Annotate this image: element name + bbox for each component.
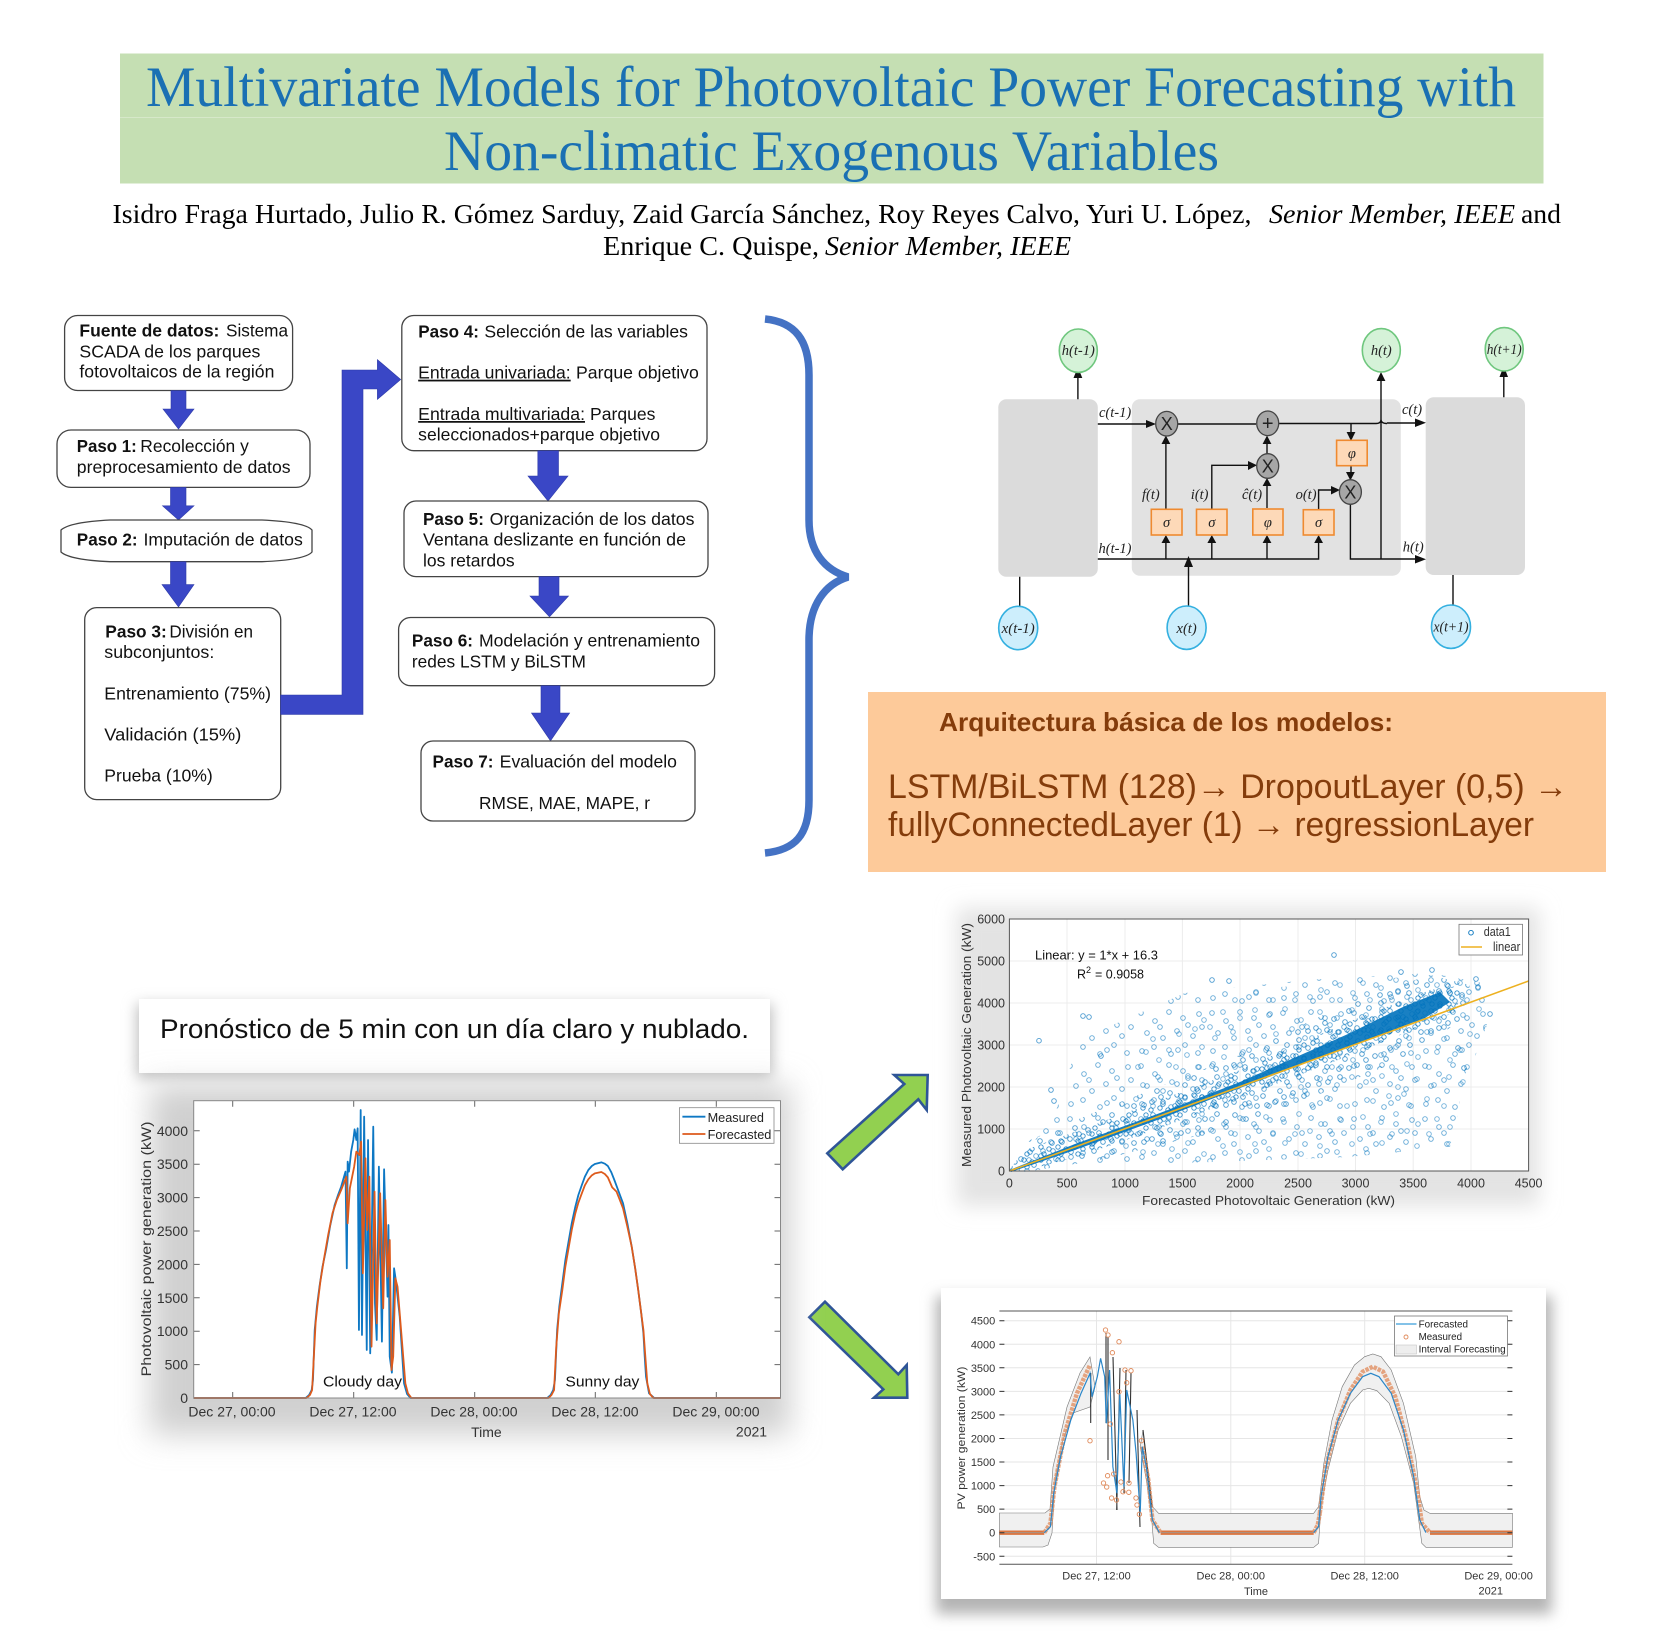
gate: input multiply [1257,454,1279,478]
x axis labels: 2500 [1284,1176,1312,1190]
x axis labels: Dec 28, 12:00 [551,1404,639,1420]
box: paso 3: División en [169,621,253,641]
box: paso 6: redes LSTM y BiLSTM [412,651,586,671]
y axis labels: 3000 [977,1038,1005,1052]
authors: Enrique C. Quispe, [603,231,819,261]
fit equation: 2 [1086,965,1091,975]
plot border [194,1101,780,1398]
x axis labels: Dec 28, 00:00 [1197,1570,1265,1582]
forecasted curve [194,1142,780,1398]
arrow: paso 6 to paso 7 [532,686,570,741]
x axis labels: 3000 [1342,1176,1369,1190]
y axis labels: 2000 [157,1256,188,1272]
gate: forget multiply: X [1161,414,1173,434]
box: paso 4: Entrada multivariada: [418,404,585,424]
output node: h(t-1) [1059,329,1097,372]
scatter plot [957,908,1543,1208]
x axis title: Forecasted Photovoltaic Generation (kW) [1142,1194,1395,1208]
authors: Senior Member, IEEE [825,231,1072,261]
y axis labels: 2500 [971,1410,995,1422]
box: paso 3: Validación (15%) [104,724,241,744]
x axis labels: Time [471,1424,502,1440]
y axis labels: 500 [165,1357,188,1373]
input node: x(t-1) [999,606,1038,650]
gate: cell add: + [1262,413,1274,435]
y axis labels: 500 [977,1504,995,1516]
output node: h(t+1) [1485,328,1523,371]
legend: Interval Forecasting [1419,1345,1506,1356]
box: paso 2 [61,520,312,562]
y axis labels [157,1123,188,1406]
y axis labels: 1500 [971,1457,995,1469]
x axis labels: Dec 27, 12:00 [309,1404,397,1420]
input node: x(t) [1167,606,1206,649]
input node: x(t+1) [1432,605,1470,648]
arrow: to scatter plot [827,1075,928,1169]
box: paso 3: Paso 3: [105,621,167,641]
x axis labels: 2021 [736,1424,767,1440]
interval band: fall and second day [1140,1354,1512,1547]
gate: output multiply [1339,480,1361,504]
input node: x(t+1): x(t+1) [1433,620,1469,636]
box: paso 7: Paso 7: [432,752,494,772]
y axis labels: 2000 [971,1434,995,1446]
box: paso 7: RMSE, MAE, MAPE, r [479,793,650,813]
y axis labels [971,1316,995,1563]
panel shadow [936,1296,1552,1614]
x axis labels: Dec 28, 00:00 [430,1404,518,1420]
cell: left [998,399,1098,577]
x axis labels: Time [1244,1586,1268,1598]
gridlines [999,1311,1512,1564]
x axis labels: Dec 28, 12:00 [1330,1570,1399,1582]
gate: output multiply: X [1344,482,1356,502]
x axis labels: 0 [1006,1176,1013,1190]
activation: input sigma [1196,509,1227,535]
title banner: Multivariate Models for Photovoltaic Power Forecasting with [146,56,1516,119]
signal labels: h(t) [1403,540,1424,556]
output node: h(t-1): h(t-1) [1062,343,1095,359]
cell: right [1426,397,1525,575]
brace [765,319,848,853]
interval band: first rise [999,1357,1095,1547]
panel: model architecture: fullyConnectedLayer (1) → regressionLayer [888,806,1534,844]
ticks [194,1101,780,1398]
measured points [999,1365,1512,1533]
y axis labels: 1500 [157,1290,188,1306]
day labels: Sunny day [565,1375,640,1391]
signal labels: i(t) [1191,487,1209,503]
x axis labels: 4500 [1515,1176,1543,1190]
scatter cloud [1009,953,1492,1172]
x axis labels: 3500 [1399,1176,1427,1190]
x axis labels [1006,1176,1543,1190]
output node: h(t+1): h(t+1) [1487,342,1522,358]
signal labels: f(t) [1142,487,1160,503]
legend: data1 [1484,925,1511,939]
soft shadow [957,908,1539,1206]
x axis labels [1062,1570,1533,1598]
y axis labels [977,912,1005,1178]
fit equation: Linear: y = 1*x + 16.3 [1035,948,1158,962]
legend [1459,924,1522,955]
signal labels: ĉ(t) [1242,487,1262,503]
box: paso 5 [404,501,708,577]
y axis labels: 3500 [157,1156,188,1172]
legend: Forecasted [708,1127,771,1142]
activation: candidate phi [1253,509,1283,535]
fit equation: = 0.9058 [1095,967,1144,981]
day labels [323,1375,640,1391]
title banner [120,54,1544,184]
box: paso 5: Paso 5: [423,509,484,529]
box: paso 3: Entrenamiento (75%) [104,683,271,703]
box: paso 4: Parque objetivo [576,363,699,383]
output node: h(t) [1362,329,1400,372]
fit equation: R [1077,967,1086,981]
soft shadow [150,1085,790,1435]
x axis labels: Dec 29, 00:00 [1464,1570,1533,1582]
box: paso 3: subconjuntos: [104,642,214,662]
activation: forget sigma: σ [1163,515,1171,531]
y axis labels: 1000 [157,1323,188,1339]
signal labels: h(t-1) [1098,541,1132,557]
arrow: fuente to paso 1 [163,391,194,429]
y axis labels: 4500 [971,1316,995,1328]
box: paso 4: Entrada univariada: [418,363,571,383]
y axis labels: 3000 [157,1190,188,1206]
authors: Isidro Fraga Hurtado, Julio R. Gómez Sarduy, Zaid García Sánchez, Roy Reyes Calvo, Yuri U. López, [112,199,1252,229]
output node: h(t): h(t) [1371,343,1392,359]
measured outliers [1088,1328,1144,1517]
y axis labels: 0 [989,1528,995,1540]
title banner: Non-climatic Exogenous Variables [444,120,1219,183]
y axis labels: 4000 [977,996,1005,1010]
signal labels: o(t) [1296,487,1317,503]
panel [941,1288,1546,1599]
authors: Senior Member, IEEE [1269,199,1516,229]
line chart: 5 min forecast [138,1085,790,1440]
box: paso 7 [421,741,695,821]
box: fuente de datos: Sistema [226,321,288,341]
forecast line [1044,1358,1426,1533]
arrow: paso 4 to paso 5 [528,451,568,501]
flowchart [57,316,715,821]
y axis labels: 2500 [157,1223,188,1239]
arrow: paso 1 to paso 2 [162,487,194,520]
activation: input sigma: σ [1208,515,1216,531]
activation: cell phi: φ [1348,446,1356,462]
activation: output sigma: σ [1315,515,1323,531]
arrow: paso 5 to paso 6 [530,577,568,617]
y axis labels: 3000 [971,1386,995,1398]
y axis labels: 2000 [977,1080,1005,1094]
activation: output sigma [1303,510,1334,535]
box: paso 1: preprocesamiento de datos [77,457,291,477]
y axis labels: 1000 [971,1481,995,1493]
box: paso 6 [399,618,715,686]
panel: model architecture [868,692,1606,872]
legend: Measured [1419,1332,1462,1343]
day labels: Cloudy day [323,1375,403,1391]
authors [112,199,1562,261]
y axis title: PV power generation (kW) [956,1366,968,1510]
authors: and [1521,199,1562,229]
box: paso 7: Evaluación del modelo [500,752,677,772]
panel: model architecture: Arquitectura básica de los modelos: [939,707,1393,737]
fit equation [1035,948,1158,981]
x axis labels: 1000 [1111,1176,1139,1190]
x axis labels: 2000 [1226,1176,1254,1190]
x axis labels: 1500 [1168,1176,1196,1190]
legend: Measured [708,1110,764,1125]
panel: model architecture: LSTM/BiLSTM (128)→ DropoutLayer (0,5) → [888,768,1568,806]
plot area [194,1101,780,1398]
box: paso 4: Paso 4: [418,321,479,341]
signal labels [1098,402,1424,557]
box: paso 3 [85,608,281,800]
box: paso 5: los retardos [423,550,515,570]
x axis labels: 4000 [1457,1176,1485,1190]
LSTM diagram [998,328,1525,650]
axis frame [999,1311,1512,1564]
measured curve [194,1110,780,1398]
activation: cell phi [1337,440,1367,466]
y axis labels: 3500 [971,1363,995,1375]
x axis labels: Dec 27, 00:00 [188,1404,276,1420]
box: fuente de datos [65,316,293,390]
gridlines [1009,919,1529,1171]
arrow: to interval forecast [809,1302,907,1398]
y axis labels: 1000 [977,1122,1005,1136]
plot area [1009,919,1529,1171]
box: paso 1 [57,430,310,487]
y axis labels: 6000 [977,912,1005,926]
input node: x(t-1): x(t-1) [1001,621,1035,637]
plot border [1009,919,1529,1171]
box: paso 1: Paso 1: [77,436,137,456]
box: paso 6: Paso 6: [412,631,473,651]
box: paso 5: Ventana deslizante en función de [423,530,686,550]
legend: linear [1493,940,1520,954]
y axis labels: 4000 [971,1339,995,1351]
x axis labels: 2021 [1479,1585,1503,1597]
x axis labels: Dec 27, 12:00 [1062,1570,1131,1582]
y axis labels: 0 [180,1390,188,1406]
caption box [137,999,772,1078]
activation: forget sigma [1151,509,1182,535]
interval jagged edges [1091,1333,1152,1527]
box: paso 6: Modelación y entrenamiento [479,631,700,651]
box: paso 4 [402,316,707,451]
y axis labels: -500 [973,1551,995,1563]
input node: x(t): x(t) [1176,621,1197,637]
y axis labels: 0 [998,1164,1005,1178]
gate: input multiply: X [1262,456,1274,476]
signal labels: c(t) [1402,402,1422,418]
box: paso 4: Selección de las variables [484,321,688,341]
cell: center [1132,399,1401,576]
y axis labels: 4000 [157,1123,188,1139]
y axis title: Measured Photovoltaic Generation (kW) [960,923,974,1167]
box: paso 3: Prueba (10%) [104,765,213,785]
legend [679,1108,774,1143]
caption box: Pronóstico de 5 min con un día claro y nublado. [160,1014,749,1044]
linear fit [1009,981,1529,1171]
box: paso 2: Imputación de datos [144,530,303,550]
interval forecast chart [936,1288,1552,1614]
legend [1394,1316,1508,1356]
gate: forget multiply [1156,411,1178,436]
box: paso 4: seleccionados+parque objetivo [418,425,660,445]
signal labels: c(t-1) [1099,405,1131,421]
x axis labels: Dec 29, 00:00 [672,1404,760,1420]
legend: Forecasted [1419,1319,1468,1330]
box: fuente de datos: SCADA de los parques [79,342,261,362]
box: fuente de datos: fotovoltaicos de la región [79,362,274,382]
x axis labels: 500 [1057,1176,1077,1190]
x axis labels [188,1404,767,1440]
box: paso 1: Recolección y [140,436,249,456]
activation: candidate phi: φ [1264,515,1272,531]
arrow: paso 2 to paso 3 [162,562,194,607]
gate: cell add [1257,411,1279,436]
box: fuente de datos: Fuente de datos: [79,321,219,341]
box: paso 2: Paso 2: [77,530,138,550]
box: paso 5: Organización de los datos [490,509,695,529]
arrow: paso 3 elbow to paso 4 [281,360,401,714]
connections [1020,366,1508,606]
y axis title: Photovoltaic power generation (kW) [138,1122,154,1376]
y axis labels: 5000 [977,954,1005,968]
box: paso 4: Parques [590,404,656,424]
